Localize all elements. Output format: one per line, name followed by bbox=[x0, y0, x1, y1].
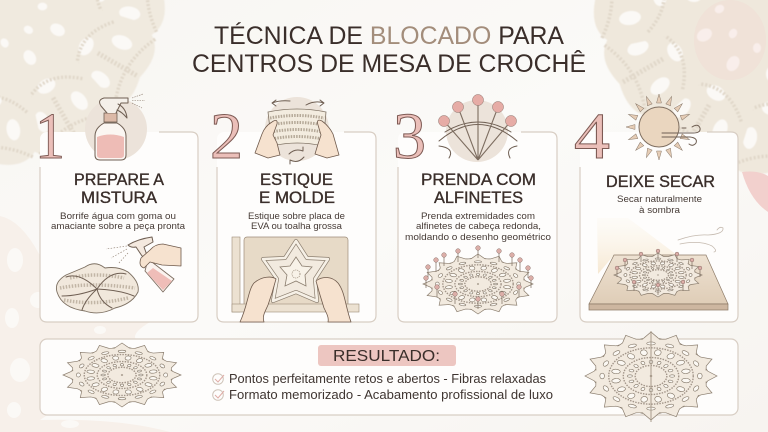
text: step 4 description: à sombra bbox=[639, 205, 681, 215]
heading: estique e molde bbox=[259, 171, 335, 207]
text: step 2 description bbox=[248, 211, 345, 231]
checklist bbox=[213, 372, 553, 402]
title: CENTROS DE MESA DE CROCHÊ bbox=[192, 49, 586, 78]
text: step 3 description bbox=[405, 211, 551, 242]
heading: estique e molde: E MOLDE bbox=[259, 189, 335, 207]
number 2: 2 bbox=[210, 100, 243, 173]
icon: hands stretching knit bbox=[255, 97, 339, 164]
illustration: hand with spray bottle bbox=[106, 237, 181, 292]
text: step 2 description: Estique sobre placa de bbox=[248, 211, 345, 221]
text: step 1 description: amaciante sobre a peça pronta bbox=[51, 221, 186, 231]
illustration: star on board with rulers bbox=[232, 237, 359, 322]
checklist: Formato memorizado - Acabamento profissional de luxo bbox=[229, 388, 553, 402]
heading: prenda com alfinetes bbox=[421, 171, 536, 207]
text: step 3 description: moldando o desenho geométrico bbox=[405, 232, 551, 242]
panel: step 1 bbox=[35, 94, 198, 322]
icon: spray bottle bbox=[85, 94, 147, 160]
text: step 3 description: alfinetes de cabeça redonda, bbox=[416, 221, 541, 231]
badge: resultado: RESULTADO: bbox=[333, 348, 440, 365]
text: step 4 description bbox=[617, 194, 702, 215]
number 4: 4 bbox=[574, 100, 610, 173]
badge: resultado bbox=[318, 345, 456, 366]
illustration: doily drying on board bbox=[589, 218, 728, 310]
panel: resultado bbox=[39, 314, 744, 432]
checklist: Pontos perfeitamente retos e abertos - Fibras relaxadas bbox=[229, 372, 546, 386]
heading: estique e molde: ESTIQUE bbox=[260, 171, 333, 189]
text: step 1 description bbox=[51, 211, 186, 231]
number 3: 3 bbox=[393, 100, 426, 173]
title bbox=[192, 21, 586, 78]
title: TÉCNICA DE BLOCADO PARA bbox=[214, 21, 564, 50]
text: step 4 description: Secar naturalmente bbox=[617, 194, 702, 204]
heading: deixe secar: DEIXE SECAR bbox=[606, 173, 715, 191]
panel: step 3 bbox=[393, 94, 557, 326]
number 1: 1 bbox=[35, 100, 65, 173]
heading: prepare a mistura: PREPARE A bbox=[74, 171, 164, 189]
heading: prepare a mistura: MISTURA bbox=[81, 189, 157, 207]
text: step 1 description: Borrife água com goma ou bbox=[60, 211, 176, 221]
heading: prenda com alfinetes: ALFINETES bbox=[434, 189, 523, 207]
text: step 3 description: Prenda extremidades com bbox=[421, 211, 535, 221]
illustration: twisted cloth bbox=[56, 264, 138, 313]
heading: prepare a mistura bbox=[74, 171, 164, 207]
illustration: finished doily right bbox=[558, 314, 744, 432]
panel: step 2 bbox=[210, 97, 376, 322]
panel: step 4 bbox=[574, 94, 738, 322]
icon: sun and wind bbox=[626, 94, 700, 160]
text: step 2 description: EVA ou toalha grossa bbox=[251, 221, 343, 231]
illustration: pinned doily bbox=[400, 242, 556, 326]
heading: prenda com alfinetes: PRENDA COM bbox=[421, 171, 536, 189]
illustration: finished doily left bbox=[39, 330, 205, 420]
icon: pins fan bbox=[438, 94, 517, 162]
